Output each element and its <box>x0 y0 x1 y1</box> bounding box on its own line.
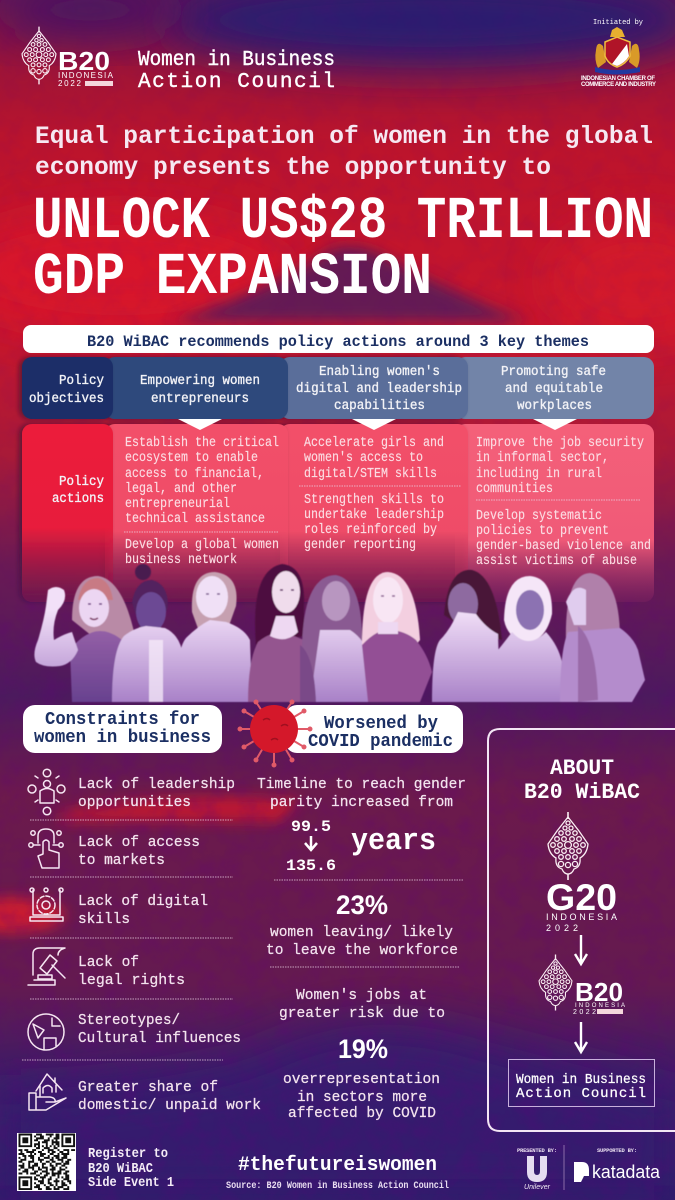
objective 2 <box>280 357 468 419</box>
objective 3: Promoting safe <box>501 365 606 380</box>
constraint: legal rights: legal rights <box>78 972 185 989</box>
constraint: unpaid work: Greater share of <box>78 1079 218 1096</box>
B20 Indonesia logo <box>539 954 625 1016</box>
heading: constraints for women in business <box>23 705 222 753</box>
action column 3 <box>455 424 654 602</box>
action column 1: Develop a global women <box>125 538 279 553</box>
supported by katadata <box>574 1147 661 1182</box>
council box: Women in Business <box>516 1072 646 1088</box>
objective 3: workplaces <box>517 399 592 414</box>
stat: 19%: Women's jobs at <box>296 987 427 1004</box>
header: council name: Women in Business <box>138 49 335 72</box>
header: B20 Indonesia logo: 2022 <box>58 79 82 88</box>
action row label: actions <box>52 492 104 507</box>
register text <box>88 1147 174 1191</box>
presented by Unilever <box>517 1147 557 1191</box>
constraint: stereotypes <box>22 1012 241 1060</box>
hero intro sentence: Equal participation of women in the global <box>35 122 653 151</box>
stat: 23%: to leave the workforce <box>266 942 458 959</box>
B20 Indonesia logo: INDONESIA <box>575 1003 625 1009</box>
constraint: stereotypes: Stereotypes/ <box>78 1012 180 1029</box>
heading: constraints for women in business: women in business <box>34 728 211 748</box>
stat: 19%: 19% <box>338 1034 388 1064</box>
panel: policy objectives row <box>22 357 654 419</box>
action column 3: Develop systematic <box>476 509 602 524</box>
supported by katadata: SUPPORTED BY: <box>597 1147 637 1154</box>
woman 8 <box>490 576 562 702</box>
woman 7 <box>432 570 502 702</box>
about heading: ABOUT <box>550 756 614 781</box>
woman 9 <box>560 573 645 702</box>
constraint: digital skills <box>30 888 233 938</box>
action column 2 <box>280 424 468 602</box>
objective 2: digital and leadership <box>296 382 462 397</box>
constraint: leadership: opportunities <box>78 794 191 811</box>
action column 3: assist victims of abuse <box>476 554 637 569</box>
header: B20 Indonesia logo: B20 <box>58 46 110 76</box>
woman 6 <box>362 572 432 702</box>
hero headline: GDP EXPANSION <box>33 244 432 311</box>
stat: 23%: women leaving/ likely <box>270 924 453 941</box>
objective 3 <box>455 357 654 419</box>
constraint: digital skills: Lack of digital <box>78 893 208 910</box>
QR code <box>17 1133 76 1191</box>
objective row label: Policy <box>59 374 104 389</box>
constraint: stereotypes: Cultural influences <box>78 1030 241 1047</box>
action column 1 <box>105 424 288 602</box>
action column 1: Establish the critical <box>125 436 279 451</box>
constraint: legal rights: Lack of <box>78 954 139 971</box>
objective 1: entrepreneurs <box>151 392 249 407</box>
action column 2: digital/STEM skills <box>304 467 437 482</box>
header: B20 Indonesia logo: INDONESIA <box>58 71 114 80</box>
woman 4 <box>248 564 314 702</box>
stat: gender parity timeline <box>257 776 466 880</box>
constraint: digital skills: skills <box>78 911 130 928</box>
stat: gender parity timeline: Timeline to reach gender <box>257 776 466 793</box>
action row label: Policy <box>59 475 104 490</box>
objective 2: Enabling women's <box>319 365 440 380</box>
stat: 19%: overrepresentation <box>283 1071 440 1088</box>
divider: sponsors <box>563 1145 565 1190</box>
woman 2 <box>112 564 182 702</box>
G20 Indonesia logo: G20 <box>546 877 617 918</box>
action column 2: Strengthen skills to <box>304 493 444 508</box>
action column 1: technical assistance <box>125 512 265 527</box>
stat: 19%: affected by COVID <box>288 1105 436 1122</box>
action column 1: access to financial, <box>125 467 264 482</box>
G20 Indonesia logo: 2022 <box>546 923 578 933</box>
constraint: markets: Lack of access <box>78 834 200 851</box>
objective 2: capabilities <box>334 399 425 414</box>
presented by Unilever: PRESENTED BY: <box>517 1147 557 1154</box>
header: council name: Action Council <box>138 71 335 94</box>
action column 3: including in rural <box>476 467 602 482</box>
action column 2: women's access to <box>304 451 423 466</box>
hero intro sentence <box>35 122 653 182</box>
initiated by: chamber of commerce emblem: INDONESIAN CHAMBER OF <box>581 76 655 82</box>
objective 1 <box>105 357 288 419</box>
action column 1: entrepreneurial <box>125 497 230 512</box>
heading: constraints for women in business: Constraints for <box>45 710 200 730</box>
action column 3: in informal sector, <box>476 451 609 466</box>
stat: gender parity timeline: 99.5 <box>291 818 331 836</box>
action column 3: policies to prevent <box>476 524 609 539</box>
hero headline <box>33 188 653 311</box>
presented by Unilever: Unilever <box>524 1184 551 1191</box>
action column 3: communities <box>476 482 553 497</box>
constraint: markets: to markets <box>78 852 165 869</box>
source: Source: B20 Women in Business Action Council <box>226 1180 449 1192</box>
objective 1: Empowering women <box>140 374 260 389</box>
arrow: G20 to B20 <box>575 935 587 964</box>
panel: about B20 WiBAC <box>488 729 675 1131</box>
header: B20 Indonesia logo <box>22 27 114 88</box>
council box <box>508 1060 654 1106</box>
stat: gender parity timeline: parity increased from <box>270 794 453 811</box>
action column 2: Accelerate girls and <box>304 436 444 451</box>
about heading <box>524 756 640 805</box>
initiated by: chamber of commerce emblem <box>581 19 656 88</box>
constraint: unpaid work: domestic/ unpaid work <box>78 1097 261 1114</box>
hero intro sentence: economy presents the opportunity to <box>35 153 551 182</box>
action row label <box>22 424 113 602</box>
register text: Register to <box>88 1147 168 1162</box>
arrows from objectives to actions <box>178 419 577 430</box>
illustration: group of nine women <box>34 564 645 702</box>
stat: gender parity timeline: years <box>351 824 436 859</box>
register text: B20 WiBAC <box>88 1162 153 1177</box>
B20 Indonesia logo: 2022 <box>573 1009 596 1016</box>
action column 1: legal, and other <box>125 482 237 497</box>
heading: worsened by COVID pandemic: Worsened by <box>324 714 438 734</box>
objective row label <box>22 357 113 419</box>
action column 2: gender reporting <box>304 538 416 553</box>
action column 3: gender-based violence and <box>476 539 651 554</box>
heading: worsened by COVID pandemic: COVID pandemic <box>308 732 453 752</box>
supported by katadata: katadata <box>592 1162 661 1182</box>
stat: 19% <box>279 987 445 1122</box>
B20 Indonesia logo: B20 <box>575 977 623 1007</box>
initiated by: chamber of commerce emblem: COMMERCE AND INDUSTRY <box>581 82 656 88</box>
action column 1: business network <box>125 553 237 568</box>
constraint: legal rights <box>28 948 233 999</box>
action column 2: undertake leadership <box>304 508 444 523</box>
objective row label: objectives <box>29 392 104 407</box>
stat: 19%: greater risk due to <box>279 1005 445 1022</box>
constraint: markets <box>29 829 233 877</box>
register text: Side Event 1 <box>88 1176 174 1191</box>
constraint: leadership: Lack of leadership <box>78 776 235 793</box>
panel: policy actions row <box>22 424 654 602</box>
constraint: leadership <box>28 769 235 820</box>
banner: 3 key themes <box>23 325 654 353</box>
banner: 3 key themes: B20 WiBAC recommends policy actions around 3 key themes <box>87 333 589 351</box>
about heading: B20 WiBAC <box>524 780 640 805</box>
council box: Action Council <box>516 1086 646 1102</box>
stat: 23% <box>266 890 460 967</box>
woman 3 <box>176 572 252 702</box>
G20 Indonesia logo: INDONESIA <box>546 912 617 922</box>
woman 5 <box>300 575 374 702</box>
action column 1: ecosystem to enable <box>125 451 258 466</box>
list: constraints <box>22 769 261 1114</box>
stat: gender parity timeline: 135.6 <box>286 857 336 875</box>
arrow: B20 to council <box>575 1022 587 1052</box>
COVID stats column <box>257 776 466 1122</box>
action column 3: Improve the job security <box>476 436 644 451</box>
G20 Indonesia logo <box>546 812 617 933</box>
stat: 19%: in sectors more <box>297 1089 427 1106</box>
woman 1 <box>34 576 138 702</box>
icon: virus <box>238 700 312 766</box>
initiated by: chamber of commerce emblem: Initiated by <box>593 19 643 27</box>
objective 3: and equitable <box>505 382 603 397</box>
stat: 23%: 23% <box>336 890 388 920</box>
constraint: unpaid work <box>29 1074 261 1114</box>
action column 2: roles reinforced by <box>304 523 437 538</box>
heading: worsened by COVID pandemic <box>285 705 463 753</box>
header: council name <box>138 49 335 94</box>
hashtag: #thefutureiswomen <box>238 1154 437 1177</box>
